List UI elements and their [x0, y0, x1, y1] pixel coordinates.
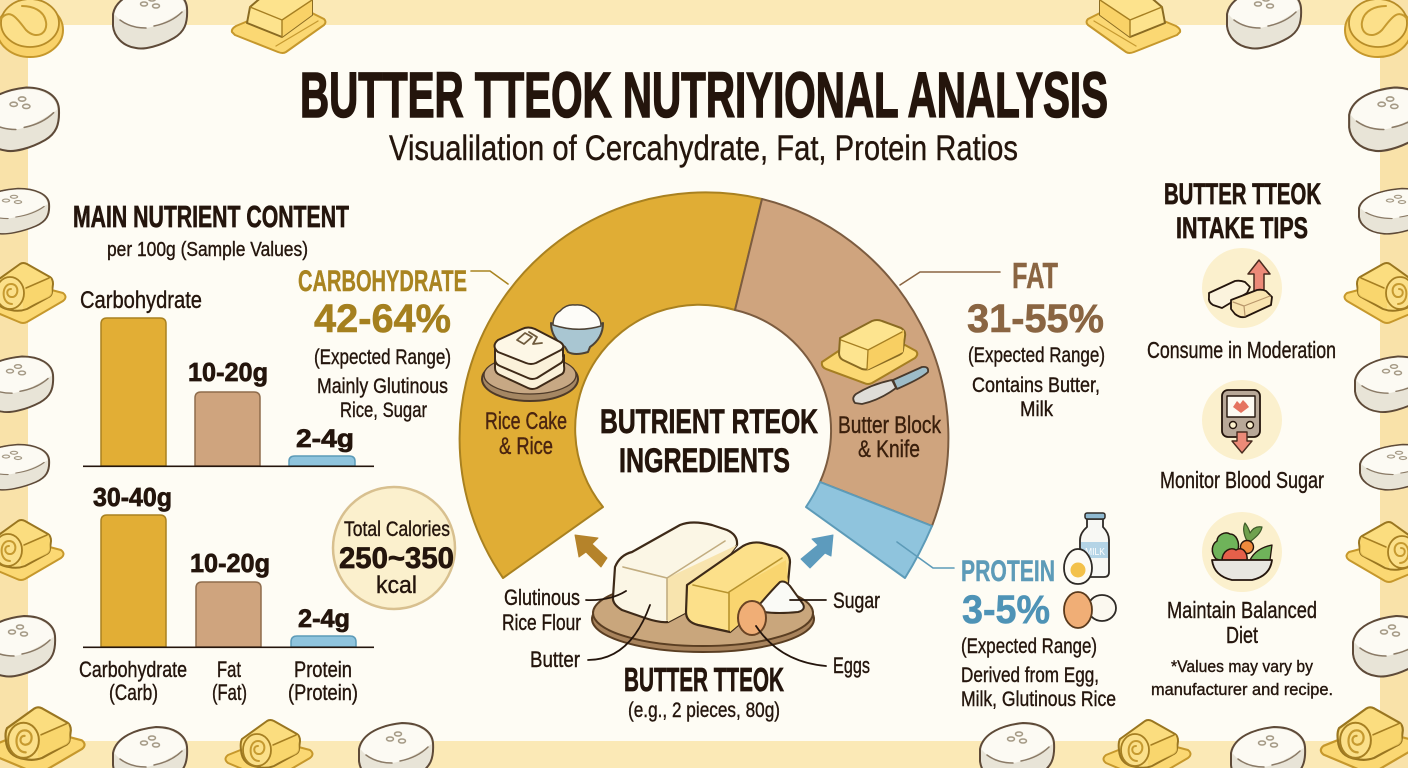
callout: fat	[900, 255, 1105, 421]
label: maintain balanced diet: Maintain Balanced	[1167, 597, 1317, 623]
center label	[600, 403, 818, 480]
label: butter block and knife: Butter Block	[838, 412, 942, 439]
icon: maintain balanced diet	[1202, 512, 1282, 592]
labels: ingredients: Eggs	[833, 653, 870, 678]
heading: butter tteok	[624, 661, 784, 722]
bar chart: bottom: 2-4g	[298, 605, 350, 633]
callout: fat: FAT	[1012, 255, 1058, 296]
sub heading: per 100g (Sample Values)	[107, 239, 308, 261]
label: maintain balanced diet: Diet	[1226, 622, 1258, 648]
subtitle: Visualilation of Cercahydrate, Fat, Protein Ratios	[389, 129, 1018, 168]
callout: fat: (Expected Range)	[968, 344, 1105, 367]
bar chart: bottom: (Fat)	[212, 680, 247, 705]
panel: main nutrient content	[73, 199, 374, 705]
label: consume in moderation: Consume in Moderation	[1147, 337, 1336, 363]
label: rice cake and rice	[485, 408, 567, 460]
callout: protein: Derived from Egg,	[961, 664, 1099, 687]
labels: ingredients: Glutinous	[504, 585, 580, 610]
labels: ingredients: Butter	[530, 647, 580, 672]
heading: main nutrient content: MAIN NUTRIENT CONTENT	[73, 199, 349, 234]
callout: protein: Milk, Glutinous Rice	[961, 688, 1116, 711]
left band	[0, 0, 28, 768]
icon: milk bottle and eggs: MILK	[1085, 547, 1105, 558]
label: maintain balanced diet	[1167, 597, 1317, 648]
labels: ingredients: Rice Flour	[502, 610, 581, 635]
label: butter block and knife: & Knife	[858, 436, 920, 463]
label: monitor blood sugar: Monitor Blood Sugar	[1160, 467, 1324, 493]
bar chart: top	[80, 287, 374, 467]
callout: fat: 31-55%	[967, 297, 1104, 341]
callout: protein: PROTEIN	[961, 555, 1055, 588]
callout: carbohydrate	[298, 265, 508, 422]
label: rice cake and rice: Rice Cake	[485, 408, 567, 435]
bar chart: top: Carbohydrate	[80, 287, 202, 314]
labels: ingredients	[502, 585, 880, 678]
arrow: to carbohydrate	[575, 535, 607, 567]
heading: intake tips: INTAKE TIPS	[1176, 212, 1308, 245]
callout: total calories: 250~350	[339, 542, 454, 575]
center label: BUTRIENT RTEOK	[600, 403, 818, 441]
segment: carbohydrate	[460, 192, 762, 578]
arrow: to protein	[801, 535, 833, 568]
callout: carbohydrate: (Expected Range)	[314, 346, 451, 369]
bar chart: bottom: Fat	[217, 657, 241, 682]
callout: fat: Milk	[1020, 398, 1053, 421]
callout: total calories	[333, 487, 455, 609]
bar chart: top: 10-20g	[188, 357, 268, 387]
panel: intake tips	[1147, 178, 1336, 699]
bar chart: top: 2-4g	[296, 425, 354, 453]
bar chart: bottom: Carbohydrate	[79, 657, 187, 682]
icon: rice cake and bowl	[482, 305, 603, 401]
label: rice cake and rice: & Rice	[499, 433, 553, 460]
callout: protein: (Expected Range)	[961, 635, 1097, 658]
icon: consume in moderation	[1202, 248, 1282, 328]
callout: carbohydrate: CARBOHYDRATE	[298, 265, 467, 298]
icon: milk bottle and eggs	[1064, 513, 1116, 628]
bar chart: bottom: 10-20g	[190, 548, 270, 578]
heading: butter tteok: (e.g., 2 pieces, 80g)	[628, 699, 780, 722]
icon: monitor blood sugar	[1202, 380, 1282, 460]
footnote: manufacturer and recipe.	[1151, 680, 1333, 699]
bar chart: bottom: (Protein)	[288, 680, 358, 705]
donut chart: ingredients	[460, 192, 948, 578]
callout: carbohydrate: Mainly Glutinous	[317, 375, 448, 398]
bar chart: bottom: Protein	[294, 657, 352, 682]
footnote	[1151, 657, 1333, 699]
callout: fat: Contains Butter,	[972, 374, 1100, 397]
callout: carbohydrate: 42-64%	[314, 297, 451, 341]
segment: fat	[735, 199, 948, 526]
center label: INGREDIENTS	[619, 442, 790, 480]
bar chart: bottom: (Carb)	[109, 680, 158, 705]
callout: protein: 3-5%	[962, 588, 1050, 632]
footnote: *Values may vary by	[1171, 657, 1313, 676]
callout: total calories: Total Calories	[344, 518, 450, 541]
callout: total calories: kcal	[376, 572, 417, 599]
labels: ingredients: Sugar	[833, 588, 880, 613]
icon: butter tteok on plate	[592, 522, 814, 652]
heading: intake tips	[1164, 178, 1321, 245]
icon: butter block and knife	[822, 320, 928, 404]
callout: carbohydrate: Rice, Sugar	[340, 399, 427, 422]
callout lines: ingredients	[586, 591, 826, 666]
right band	[1380, 0, 1408, 768]
heading: intake tips: BUTTER TTEOK	[1164, 178, 1321, 211]
heading: butter tteok: BUTTER TTEOK	[624, 661, 784, 698]
callout: protein	[897, 513, 1116, 711]
segment: protein	[806, 482, 932, 578]
bar chart: bottom: 30-40g	[93, 482, 172, 512]
bar chart: bottom	[79, 482, 374, 705]
label: butter block and knife	[838, 412, 942, 463]
